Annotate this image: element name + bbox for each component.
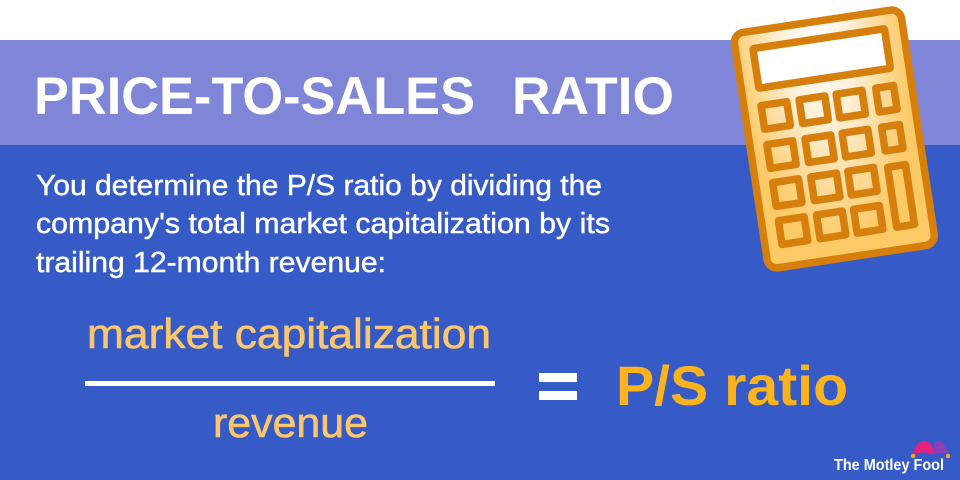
calculator display <box>753 29 890 88</box>
formula denominator: revenue <box>213 399 368 446</box>
explanatory text: You determine the P/S ratio by dividing the <box>36 170 602 202</box>
explanatory text: company's total market capitalization by its <box>36 208 610 240</box>
logo wordmark: The Motley Fool <box>834 457 944 474</box>
calculator keypad <box>761 86 915 244</box>
background: blue panel <box>0 144 960 480</box>
formula result: P/S ratio <box>616 354 848 417</box>
fraction line <box>85 381 495 386</box>
calculator body <box>733 9 936 269</box>
explanatory text <box>36 170 610 279</box>
title: PRICE-TO-SALES <box>34 67 475 126</box>
background: white top strip <box>0 0 960 40</box>
title <box>34 67 674 126</box>
equals sign <box>539 373 577 400</box>
title band <box>0 40 960 145</box>
icon: calculator <box>733 9 936 269</box>
explanatory text: trailing 12-month revenue: <box>36 247 386 279</box>
logo jester hat <box>911 441 950 458</box>
formula numerator: market capitalization <box>87 310 491 357</box>
logo: The Motley Fool <box>834 441 950 474</box>
title: RATIO <box>512 67 674 126</box>
